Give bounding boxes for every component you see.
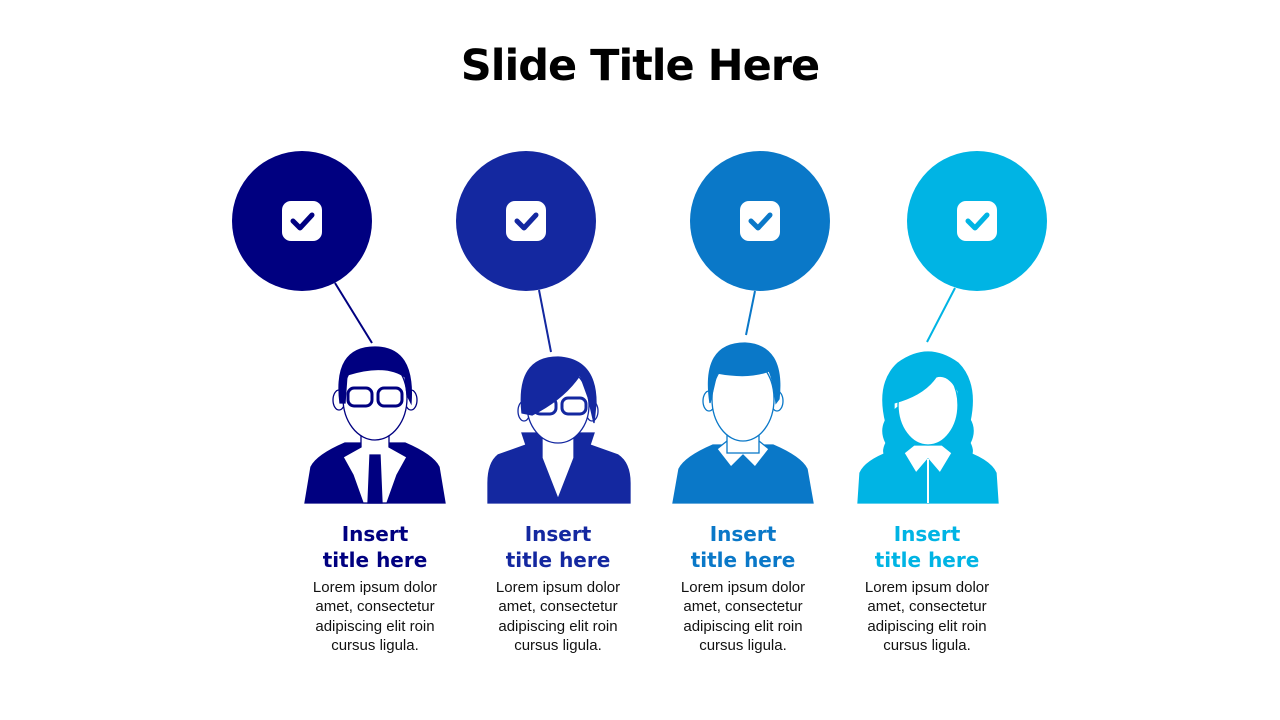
text block 3: Insert: [710, 522, 776, 546]
text block 4: Insert: [894, 522, 960, 546]
avatar 1: man with glasses and suit: [305, 347, 445, 503]
text block 2: [496, 522, 620, 654]
text block 1: Insert: [342, 522, 408, 546]
avatar 4: woman with wavy hair: [858, 352, 998, 503]
text block 1: title here: [323, 548, 427, 572]
text block 4: Lorem ipsum dolor amet, consectetur adipiscing elit roin cursus ligula.: [865, 579, 989, 654]
icon: check circle 3: [690, 151, 830, 291]
text block 3: title here: [691, 548, 795, 572]
icon: check circle 1: [232, 151, 372, 291]
text block 2: title here: [506, 548, 610, 572]
text block 1: [313, 522, 437, 654]
title: Slide Title Here: [461, 41, 819, 91]
text block 3: Lorem ipsum dolor amet, consectetur adipiscing elit roin cursus ligula.: [681, 579, 805, 654]
icon: check circle 4: [907, 151, 1047, 291]
text block 3: [681, 522, 805, 654]
icon: check circle 2: [456, 151, 596, 291]
text block 4: [865, 522, 989, 654]
avatar 3: man with collar: [673, 343, 813, 503]
connector lines: [335, 283, 955, 352]
text block 1: Lorem ipsum dolor amet, consectetur adipiscing elit roin cursus ligula.: [313, 579, 437, 654]
text block 4: title here: [875, 548, 979, 572]
text block 2: Lorem ipsum dolor amet, consectetur adipiscing elit roin cursus ligula.: [496, 579, 620, 654]
avatar 2: woman with glasses: [488, 357, 630, 503]
text block 2: Insert: [525, 522, 591, 546]
